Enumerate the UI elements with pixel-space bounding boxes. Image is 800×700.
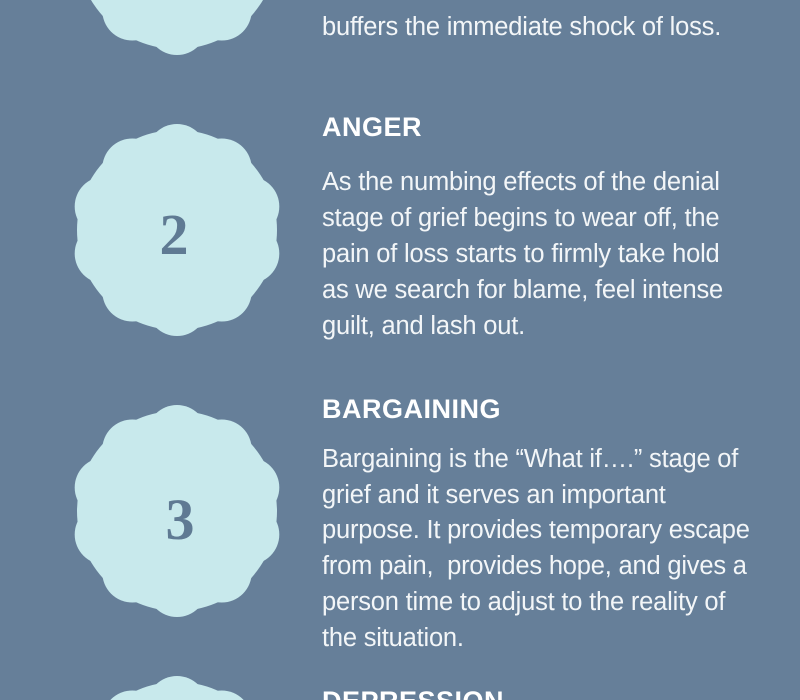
text: anger: pain of loss starts to firmly take hold (322, 240, 720, 268)
badge 2 (75, 124, 279, 336)
text: bargaining: the situation. (322, 624, 464, 652)
text: denial end: buffers the immediate shock of loss. (322, 13, 721, 41)
text: denial end (322, 0, 721, 41)
badge 3 (75, 405, 279, 617)
text: bargaining: purpose. It provides temporary escape (322, 516, 750, 544)
badge 4 (75, 676, 279, 700)
text: bargaining: person time to adjust to the reality of (322, 588, 725, 616)
badge 3: 3 (166, 487, 194, 552)
text: anger: stage of grief begins to wear off, the (322, 204, 719, 232)
text: bargaining: grief and it serves an important (322, 481, 666, 509)
heading: anger: ANGER (322, 112, 422, 142)
text: bargaining: from pain, provides hope, and gives a (322, 552, 747, 580)
heading: bargaining: BARGAINING (322, 394, 501, 424)
text: anger: As the numbing effects of the denial (322, 168, 720, 196)
text: bargaining (322, 445, 750, 652)
text: anger: as we search for blame, feel intense (322, 276, 723, 304)
badge 2: 2 (160, 202, 188, 267)
text: anger (322, 168, 723, 340)
text: anger: guilt, and lash out. (322, 312, 525, 340)
text: bargaining: Bargaining is the “What if….” stage of (322, 445, 738, 473)
badge 1 (75, 0, 279, 55)
